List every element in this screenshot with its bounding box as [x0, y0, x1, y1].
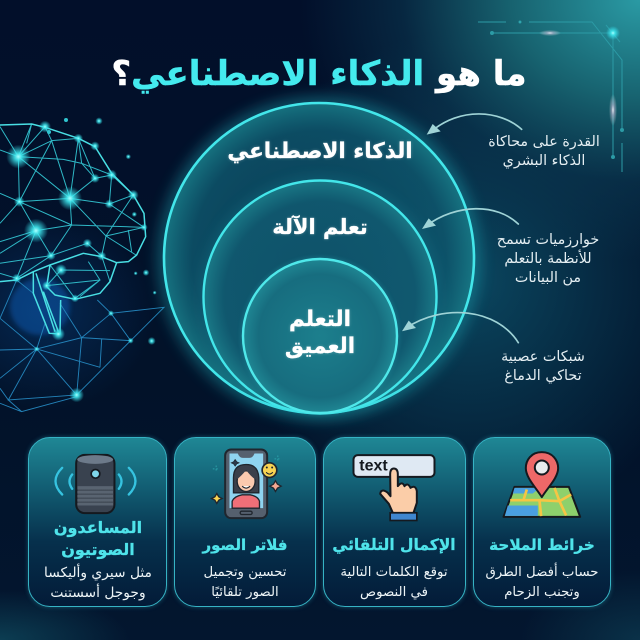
description [340, 565, 448, 600]
label: machine learning: تعلم الآلة [272, 215, 368, 239]
icon: phone selfie [210, 448, 282, 520]
description [485, 562, 599, 600]
text: DL description: تحاكي الدماغ [504, 368, 582, 384]
text: AI description: القدرة على محاكاة [488, 134, 600, 150]
text: ML description: خوارزميات تسمح [497, 232, 599, 248]
text: ML description: للأنظمة بالتعلم [504, 251, 592, 267]
icon: smart speaker [54, 454, 137, 514]
icon: text field with pointing hand [352, 454, 436, 522]
heading: المساعدون [54, 518, 142, 537]
text: AI description [488, 134, 600, 169]
card: navigation maps [473, 437, 611, 607]
description: حساب أفضل الطرق [485, 565, 599, 580]
title: ما هو الذكاء الاصطناعي؟ [111, 54, 527, 94]
text: ML description: من البيانات [515, 270, 581, 286]
description: وجوجل أسستنت [50, 585, 146, 601]
heading: الصوتيون [61, 540, 135, 559]
text: AI description: الذكاء البشري [503, 153, 585, 169]
description: تحسين وتجميل [204, 565, 286, 580]
text: DL description [501, 349, 585, 384]
description [204, 565, 286, 600]
heading: الإكمال التلقائي [332, 536, 456, 554]
label: artificial intelligence: الذكاء الاصطناعي [227, 139, 413, 164]
description: في النصوص [360, 584, 428, 600]
text: ML description [497, 232, 599, 286]
description: توقع الكلمات التالية [340, 565, 448, 580]
text: DL description: شبكات عصبية [501, 349, 585, 365]
heading: فلاتر الصور [202, 536, 288, 554]
label: deep learning [284, 307, 355, 360]
label: deep learning: العميق [285, 334, 355, 359]
description: مثل سيري وأليكسا [44, 565, 152, 581]
description: وتجنب الزحام [504, 584, 580, 600]
icon: neural network brain [0, 118, 166, 412]
icon: text field with pointing hand: text [359, 458, 388, 474]
label: deep learning: التعلم [289, 307, 351, 332]
heading: خرائط الملاحة [489, 536, 595, 554]
heading [54, 518, 142, 560]
description [44, 564, 152, 601]
icon: map with location pin [502, 451, 582, 518]
card: photo filters [174, 437, 316, 607]
card: autocomplete [323, 437, 466, 607]
description: الصور تلقائيًا [211, 584, 279, 600]
card: voice assistants [28, 437, 167, 607]
